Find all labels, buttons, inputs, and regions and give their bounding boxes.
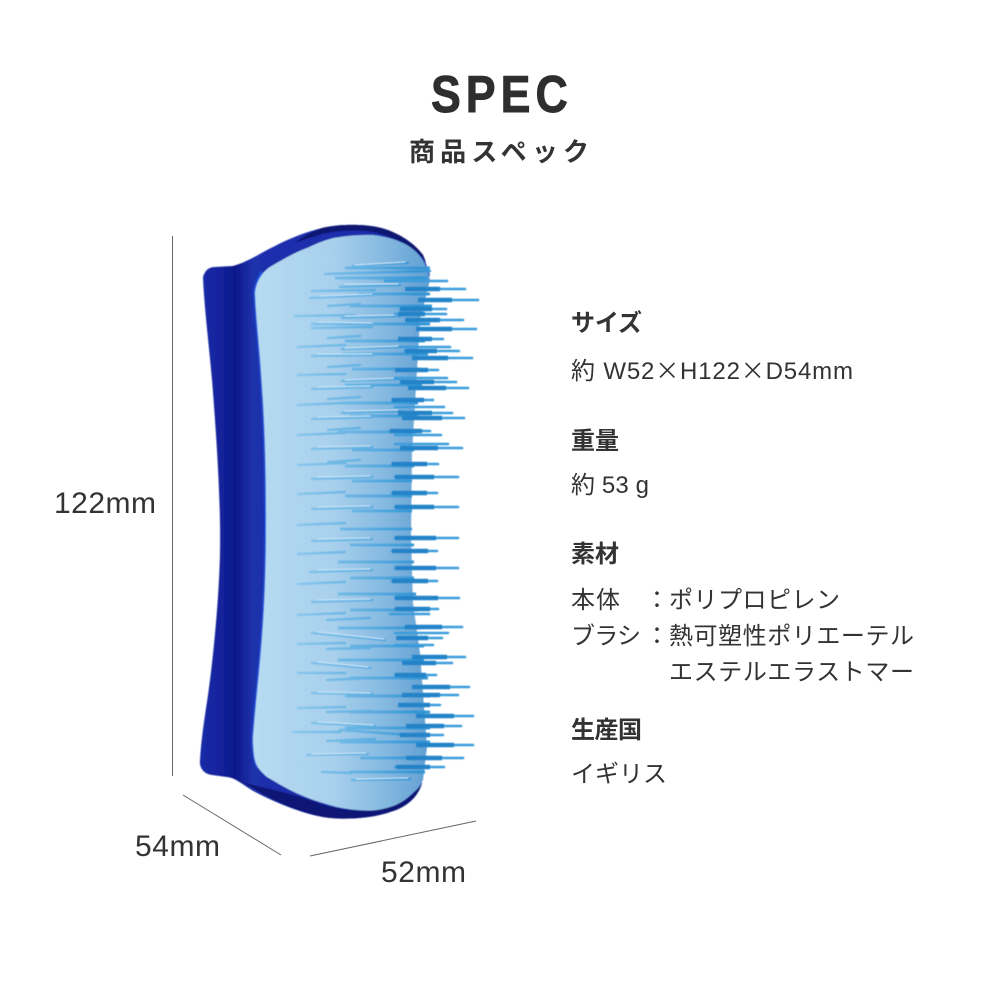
subtitle: 商品スペック	[409, 137, 589, 167]
spec: material: ポリプロピレン	[669, 587, 840, 614]
spec: weight	[571, 428, 649, 499]
bristles: pins	[293, 263, 430, 780]
spec: material: 素材	[571, 541, 619, 568]
dimension: width	[310, 821, 476, 889]
brush inner edge highlight	[253, 272, 266, 768]
brush body	[200, 225, 430, 819]
spec: size: 約 W52×H122×D54mm	[571, 351, 853, 386]
spec: material: 熱可塑性ポリエーテル	[669, 623, 914, 650]
bristles: tapered roots	[390, 289, 454, 767]
dimension: depth: 54mm	[135, 830, 220, 863]
dimension: depth	[135, 795, 281, 863]
spec: material: ブラシ	[571, 623, 641, 650]
title: SPEC	[431, 66, 568, 124]
spec: material: ：	[645, 587, 669, 614]
brush pad	[253, 235, 430, 811]
spec: material: エステルエラストマー	[669, 659, 914, 686]
brush top rim shadow	[295, 225, 426, 262]
spec: weight: 重量	[571, 428, 619, 455]
spec: country of origin: 生産国	[571, 717, 642, 744]
spec: material: ：	[645, 623, 669, 650]
spec: country of origin: イギリス	[571, 761, 667, 788]
spec: material	[571, 541, 914, 686]
spec: weight: 約 53 g	[571, 472, 649, 499]
spec: country of origin	[571, 717, 667, 788]
bristles: highlights	[312, 262, 408, 779]
brush bottom rim shadow	[245, 783, 422, 819]
spec: size	[571, 309, 853, 386]
spec: size: サイズ	[571, 309, 642, 337]
bristles: back row	[335, 268, 432, 772]
bristles: side pins	[385, 281, 478, 767]
dimension: width: 52mm	[381, 856, 466, 889]
spec: material: 本体	[571, 587, 620, 614]
dimension: height: 122mm	[54, 487, 156, 520]
product: detangling brush	[200, 225, 478, 819]
